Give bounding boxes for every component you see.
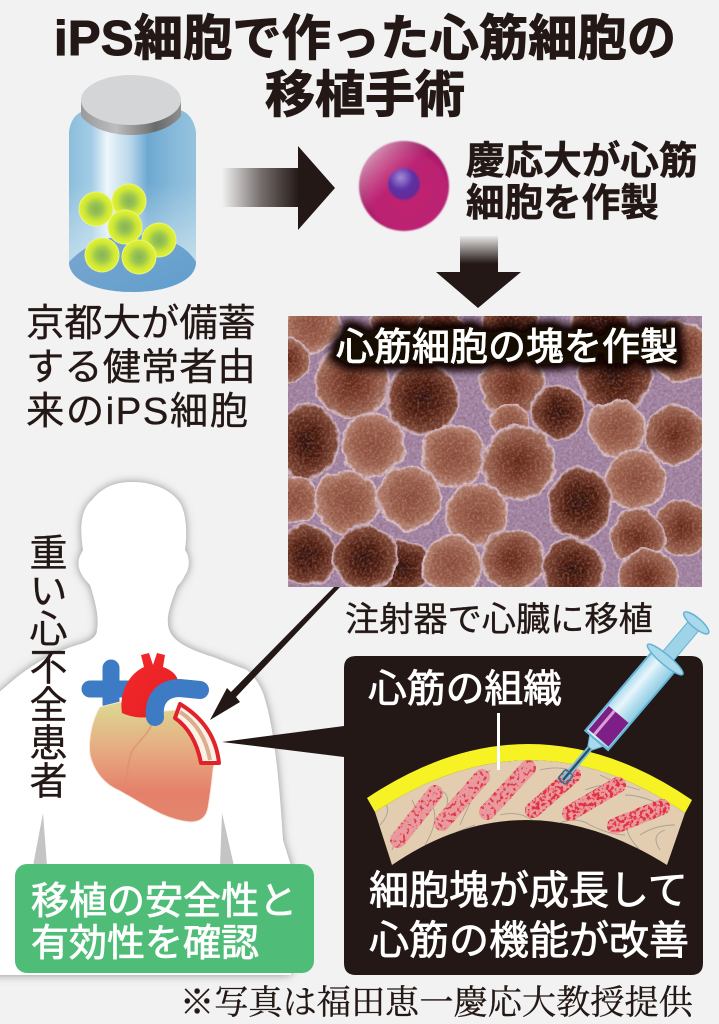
- text: cell cluster grows: 細胞塊が成長して: [369, 869, 688, 913]
- callout: safety and efficacy: [15, 864, 314, 973]
- icon: jar of iPS cells: [69, 75, 196, 292]
- arrow: cell to photo: [436, 236, 521, 308]
- text: Keio produces cardiomyocytes: [466, 140, 697, 225]
- arrow: jar to cell: [222, 146, 335, 230]
- diagram: curved heart wall: [367, 744, 692, 865]
- photo caption: 心筋細胞の塊を作製: [336, 327, 678, 369]
- title: 移植手術: [265, 67, 465, 123]
- callout: safety and efficacy: 移植の安全性と: [31, 881, 297, 923]
- text: transplant by syringe: 注射器で心臓に移植: [345, 601, 653, 639]
- arrow: photo to heart: [210, 587, 340, 720]
- label: myocardial tissue: 心筋の組織: [368, 668, 562, 711]
- text: cell cluster grows: 心筋の機能が改善: [369, 919, 689, 963]
- icon: heart: [89, 653, 219, 822]
- text: Kyoto University iPS stock: 京都大が備蓄: [26, 302, 256, 345]
- silhouette: patient upper body: [0, 482, 291, 975]
- icon: heart muscle cell: [359, 141, 449, 231]
- credit: ※写真は福田恵一慶応大教授提供: [180, 984, 694, 1022]
- text: Keio produces cardiomyocytes: 細胞を作製: [466, 182, 659, 225]
- icon: syringe: [544, 604, 717, 796]
- leader line: [497, 713, 500, 770]
- text: severe heart failure patient: 重い心不全患者: [23, 533, 67, 799]
- title: iPS細胞で作った心筋細胞の: [54, 12, 676, 66]
- cell clusters: [398, 768, 662, 840]
- title: [54, 12, 676, 123]
- callout: safety and efficacy: 有効性を確認: [31, 923, 259, 965]
- text: Kyoto University iPS stock: 来のiPS細胞: [26, 390, 248, 433]
- text: Keio produces cardiomyocytes: 慶応大が心筋: [466, 140, 697, 183]
- panel: heart muscle detail: [222, 656, 703, 975]
- text: Kyoto University iPS stock: する健常者由: [26, 346, 256, 389]
- text: Kyoto University iPS stock: [26, 302, 256, 433]
- text: cell cluster grows: [369, 869, 689, 963]
- photo: cardiomyocyte clusters: [288, 316, 702, 587]
